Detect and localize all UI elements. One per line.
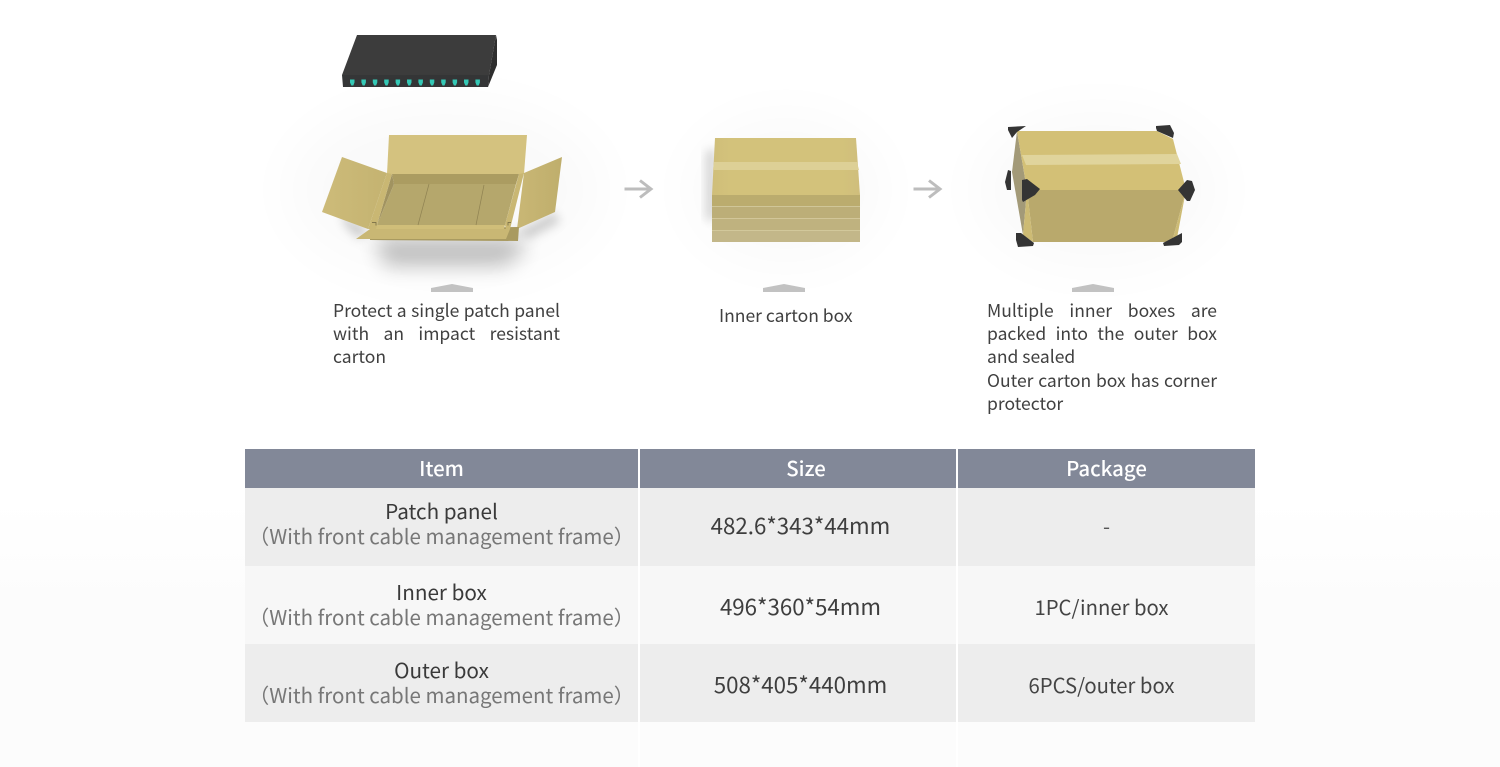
cell: inner box name: Inner box	[396, 576, 487, 606]
caption: single patch panel	[333, 298, 560, 369]
row: Patch panel	[245, 488, 1255, 566]
caption: single patch panel: with an impact resistant	[333, 321, 560, 346]
arrow: step two to three	[914, 180, 940, 198]
cell: inner box name: （With front cable management frame）	[249, 601, 634, 631]
page background fade	[0, 500, 1500, 767]
icon: pointer one	[431, 284, 473, 292]
caption: outer carton	[987, 298, 1218, 416]
header: Package: Package	[1066, 452, 1147, 482]
icon: pointer two	[763, 284, 805, 292]
caption: outer carton: packed into the outer box	[987, 321, 1217, 346]
icon: inner carton stack	[686, 115, 886, 265]
cell: outer box package: 6PCS/outer box	[1029, 669, 1174, 699]
cell: patch panel name: Patch panel	[385, 495, 498, 525]
cell: patch panel name: （With front cable management frame）	[249, 520, 634, 550]
caption: inner carton: Inner carton box	[719, 303, 853, 328]
cell: patch panel package: -	[1103, 510, 1110, 540]
caption: single patch panel: carton	[333, 344, 386, 369]
caption: outer carton: and sealed	[987, 344, 1075, 369]
cell: patch panel name	[249, 495, 634, 550]
header: Size	[640, 449, 956, 488]
caption: single patch panel: Protect a single patch panel	[333, 298, 560, 323]
cell: outer box name: （With front cable management frame）	[249, 679, 634, 709]
row: Inner box	[245, 566, 1255, 644]
cell: inner box name	[249, 576, 634, 631]
cell: outer box size: 508*405*440mm	[714, 668, 887, 700]
caption: outer carton: Multiple inner boxes are	[987, 298, 1217, 323]
column separators below table	[638, 722, 640, 767]
caption: outer carton: Outer carton box has corner	[987, 368, 1217, 393]
cell: inner box package: 1PC/inner box	[1034, 591, 1169, 621]
header: Item: Item	[419, 452, 464, 482]
icon: patch panel	[342, 35, 497, 87]
icon: open single-panel carton	[285, 100, 605, 280]
icon: sealed outer carton with corner protectors	[973, 110, 1223, 270]
specification table	[245, 449, 1255, 722]
cell: outer box name: Outer box	[394, 654, 489, 684]
cell: outer box name	[249, 654, 634, 709]
row: Outer box	[245, 644, 1255, 722]
arrow: step one to two	[624, 180, 651, 198]
caption: outer carton: protector	[987, 391, 1063, 416]
header: Item	[245, 449, 638, 488]
header: Package	[958, 449, 1255, 488]
packaging illustrations	[322, 35, 1195, 292]
icon: pointer three	[1072, 284, 1114, 292]
cell: inner box size: 496*360*54mm	[720, 590, 881, 622]
header: Size: Size	[786, 452, 826, 482]
cell: patch panel size: 482.6*343*44mm	[711, 509, 890, 541]
